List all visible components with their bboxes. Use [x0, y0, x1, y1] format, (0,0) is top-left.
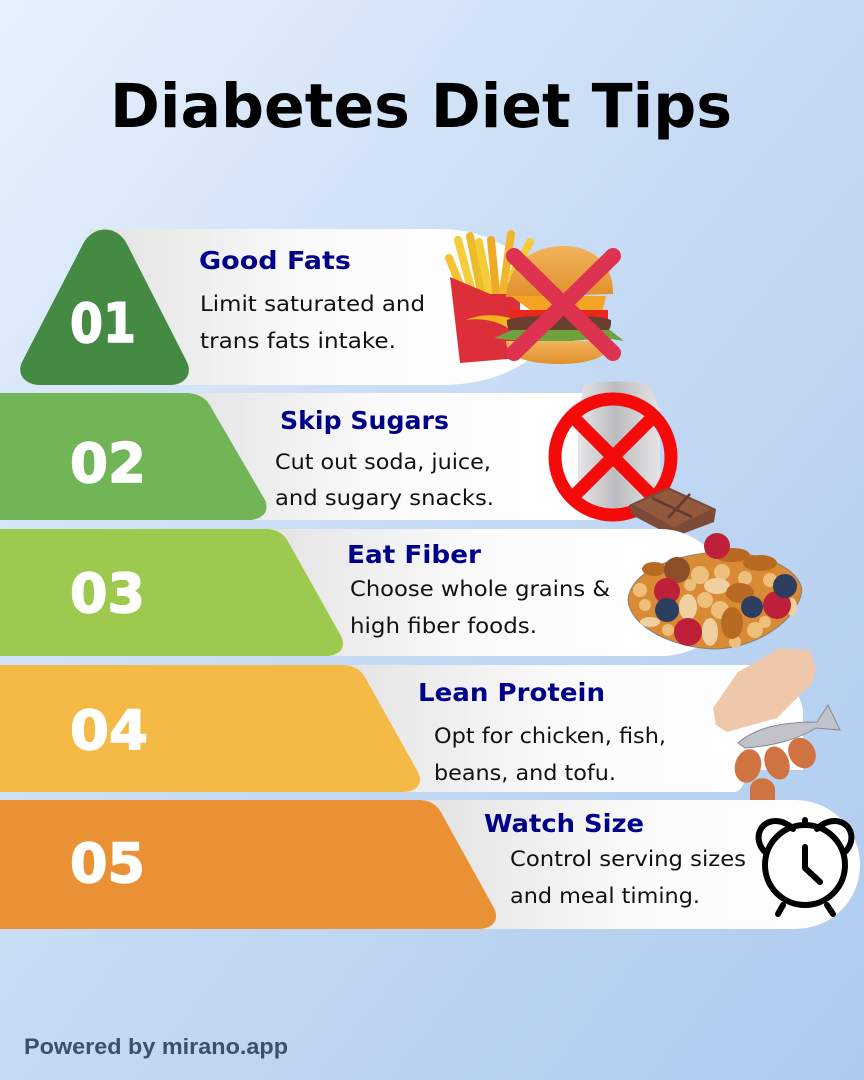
badge 05: [0, 800, 496, 929]
band 02: [170, 393, 600, 520]
heading eat fiber: Eat Fiber: [347, 540, 482, 569]
text good fats: trans fats intake.: [200, 329, 396, 353]
text lean protein: beans, and tofu.: [434, 761, 616, 785]
heading lean protein: Lean Protein: [418, 678, 605, 707]
text lean protein: Opt for chicken, fish,: [434, 724, 666, 748]
panel: tip 04 lean protein: [0, 648, 840, 803]
text skip sugars: and sugary snacks.: [275, 486, 494, 510]
icon: bowl of nuts and berries: [628, 533, 802, 649]
icon: chicken, fish and eggs: [713, 648, 840, 803]
icon: crossed out can and chocolate: [555, 382, 716, 537]
band 05: [420, 800, 860, 929]
icon: alarm clock: [759, 820, 851, 914]
text good fats: Limit saturated and: [200, 292, 425, 316]
band 03: [250, 529, 710, 656]
badge 01: [20, 230, 189, 385]
panel: tip 02 skip sugars: [0, 382, 716, 537]
text watch size: and meal timing.: [510, 884, 700, 908]
heading good fats: Good Fats: [199, 246, 351, 275]
panel: tip 03 eat fiber: [0, 529, 802, 656]
heading watch size: Watch Size: [484, 809, 644, 838]
text eat fiber: high fiber foods.: [350, 614, 537, 638]
text skip sugars: Cut out soda, juice,: [275, 450, 491, 474]
number 01: 01: [70, 292, 136, 355]
panel: tip 05 watch size: [0, 800, 860, 929]
icon: crossed out fries and burger: [449, 234, 624, 364]
badge 02: [0, 393, 266, 520]
number 03: 03: [70, 562, 145, 625]
text eat fiber: Choose whole grains &: [350, 577, 610, 601]
number 04: 04: [70, 699, 148, 762]
badge 04: [0, 665, 420, 792]
band 04: [330, 665, 803, 792]
footer credit: Powered by mirano.app: [24, 1034, 288, 1059]
panel: tip 01 good fats: [20, 229, 624, 385]
title: Diabetes Diet Tips: [110, 71, 732, 142]
text watch size: Control serving sizes: [510, 847, 746, 871]
number 02: 02: [70, 432, 146, 495]
heading skip sugars: Skip Sugars: [280, 406, 449, 435]
number 05: 05: [70, 832, 145, 895]
badge 03: [0, 529, 343, 656]
band 01: [90, 229, 545, 385]
